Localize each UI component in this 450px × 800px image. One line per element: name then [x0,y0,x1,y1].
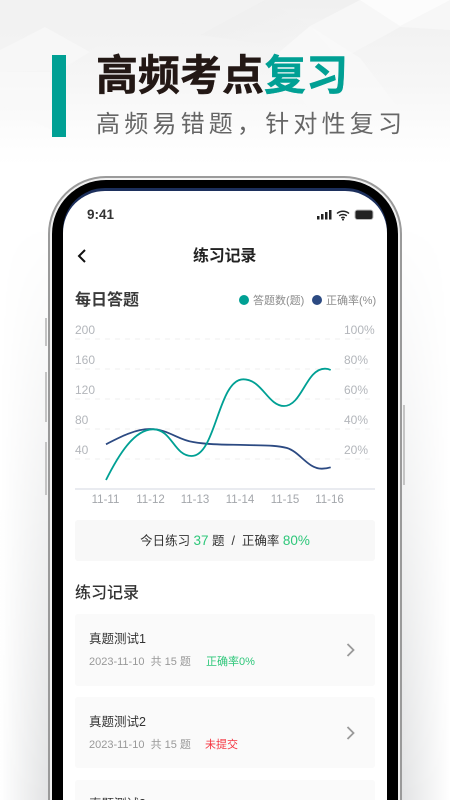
line chart: 80 [75,413,89,427]
line chart: 100% [344,323,375,337]
screen [63,191,387,800]
accent bar [52,55,66,137]
summary card: 今日练习 37 题 / 正确率 80% [140,533,310,548]
phone mockup [48,176,402,800]
line chart: 40% [344,413,368,427]
subtitle: 高频易错题，针对性复习 [96,111,406,138]
legend: question count: 答题数(题) [253,295,304,307]
legend: accuracy: 正确率(%) [326,295,376,307]
side buttons [45,318,47,346]
line chart: 11-13 [181,494,209,506]
record title: 真题测试1 [89,632,146,646]
status icons [317,210,374,221]
line chart: 11-15 [271,494,299,506]
record card 2 [75,697,375,768]
record status: 未提交 [205,739,238,751]
title: 高频考点复习 [96,52,348,99]
phone frame [48,176,402,800]
record card 3 [75,780,375,800]
record card 1 [75,614,375,686]
line chart [75,323,375,506]
line chart: 60% [344,383,368,397]
line chart: 11-11 [92,494,119,506]
summary card [75,520,375,561]
line chart: 11-12 [136,494,165,506]
status time: 9:41 [87,207,114,222]
record meta: 2023-11-10 共 15 题 [89,739,191,751]
line chart: 11-16 [315,494,344,506]
nav title: 练习记录 [193,248,256,265]
record title: 真题测试2 [89,715,146,729]
back arrow [78,249,86,263]
heading: daily questions: 每日答题 [75,292,139,309]
record meta: 2023-11-10 共 15 题 [89,656,191,668]
phone bezel [52,180,398,800]
line chart: 40 [75,443,89,457]
line chart: 80% [344,353,368,367]
line chart: 20% [344,443,368,457]
record status: 正确率0% [206,656,255,668]
heading: practice records: 练习记录 [75,585,139,602]
chevron [347,644,355,656]
line chart: 160 [75,353,95,367]
line chart: 11-14 [226,494,255,506]
line chart: 200 [75,323,95,337]
line chart: 120 [75,383,95,397]
chevron [347,726,355,740]
legend [239,294,376,307]
